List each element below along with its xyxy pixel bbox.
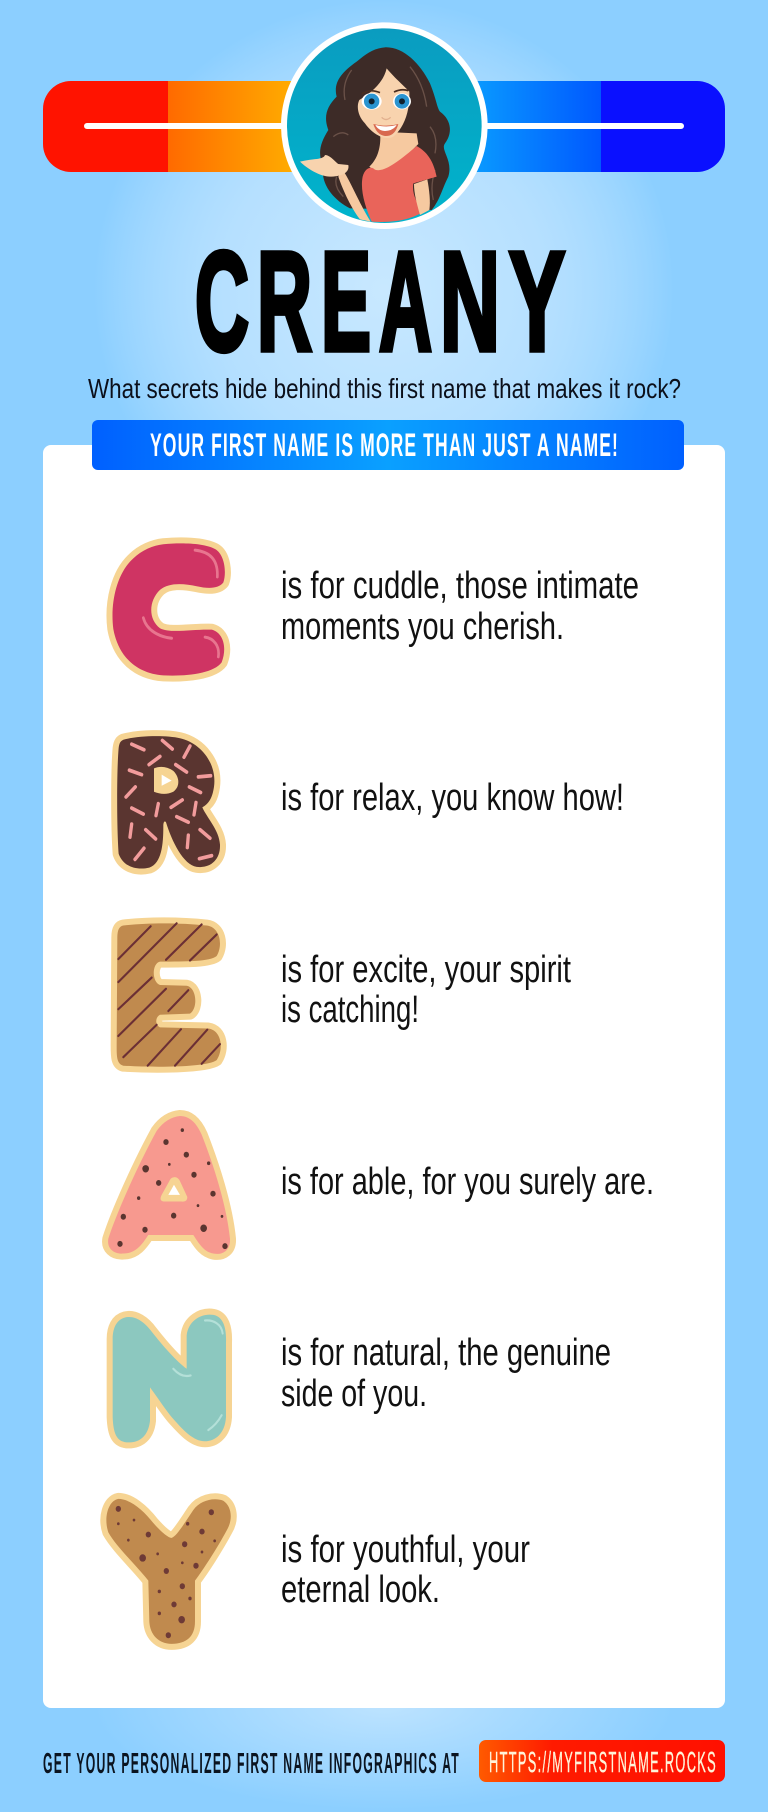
title (195, 222, 565, 380)
header gradient bar (43, 81, 725, 172)
icon: letter E (117, 923, 221, 1067)
icon: letter Y (106, 1499, 231, 1644)
text: Y: is for youthful, your (281, 1529, 530, 1571)
title: N (440, 222, 500, 380)
text: R: is for relax, you know how! (281, 777, 624, 819)
text: A: is for able, for you surely are. (281, 1161, 654, 1203)
white panel (43, 445, 725, 1708)
icon: letter A (108, 1116, 230, 1254)
text: Y: eternal look. (281, 1569, 440, 1611)
title: E (321, 222, 371, 380)
text: N: is for natural, the genuine (281, 1332, 611, 1374)
icon: letter N (113, 1315, 226, 1442)
text: N: side of you. (281, 1373, 427, 1415)
footer url button (479, 1740, 725, 1782)
text: C: is for cuddle, those intimate (281, 565, 639, 607)
text: E: is for excite, your spirit (281, 949, 571, 991)
title: R (257, 222, 312, 380)
banner (92, 420, 684, 470)
title: Y (509, 222, 565, 380)
title: C (195, 222, 249, 380)
title: A (379, 222, 432, 380)
avatar portrait (281, 22, 488, 229)
icon: letter R (117, 736, 220, 869)
icon: letter C (112, 543, 225, 676)
text: C: moments you cherish. (281, 606, 564, 648)
text: E: is catching! (281, 989, 419, 1031)
